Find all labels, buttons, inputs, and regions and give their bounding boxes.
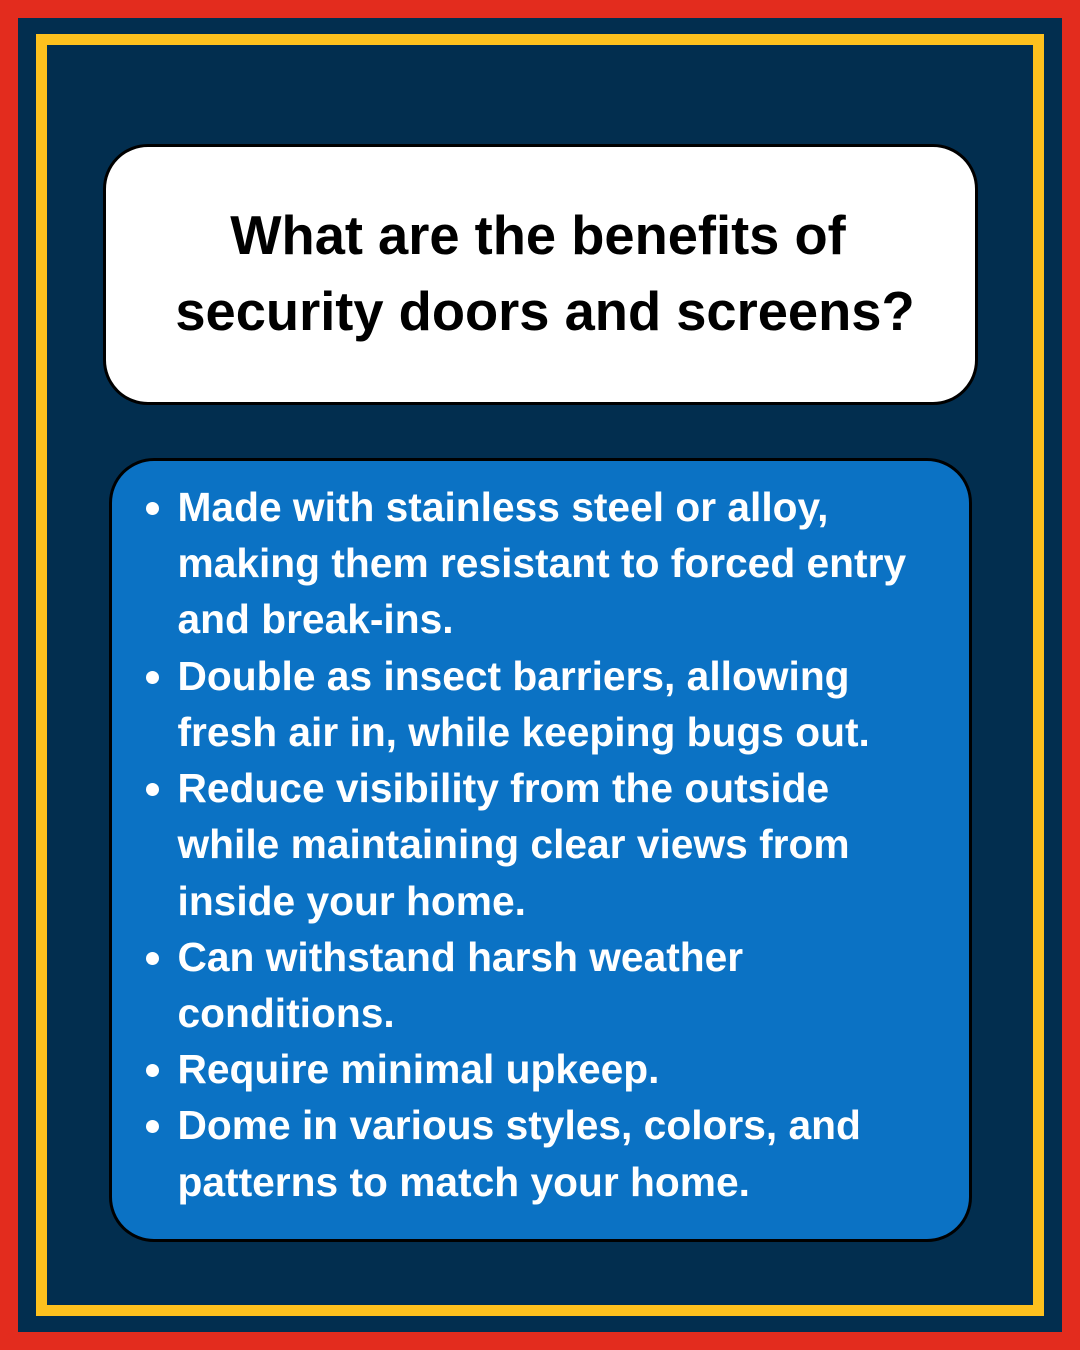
benefit 1: making them resistant to forced entry: [178, 540, 906, 586]
benefit 1: Made with stainless steel or alloy,: [178, 484, 828, 530]
benefit 3: [146, 765, 850, 924]
benefit 1: and break-ins.: [178, 596, 454, 642]
benefit 3: while maintaining clear views from: [178, 821, 850, 867]
benefit 4: [146, 934, 743, 1036]
title: [175, 205, 915, 342]
title panel: [102, 144, 978, 405]
benefit 2: fresh air in, while keeping bugs out.: [178, 709, 870, 755]
benefit 6: [146, 1102, 861, 1205]
title: security doors and screens?: [175, 281, 915, 342]
benefit 5: Require minimal upkeep.: [178, 1046, 659, 1092]
panel: benefits list: [108, 458, 972, 1242]
benefit 1: [146, 484, 906, 642]
benefit 3: inside your home.: [178, 878, 526, 924]
title: What are the benefits of: [230, 205, 846, 266]
benefit 2: Double as insect barriers, allowing: [178, 653, 850, 699]
benefit 4: Can withstand harsh weather: [178, 934, 743, 980]
benefit 2: [146, 653, 870, 755]
benefit 6: patterns to match your home.: [178, 1159, 750, 1205]
benefit 6: Dome in various styles, colors, and: [178, 1102, 861, 1148]
benefit 3: Reduce visibility from the outside: [178, 765, 829, 811]
benefit 4: conditions.: [178, 990, 395, 1036]
